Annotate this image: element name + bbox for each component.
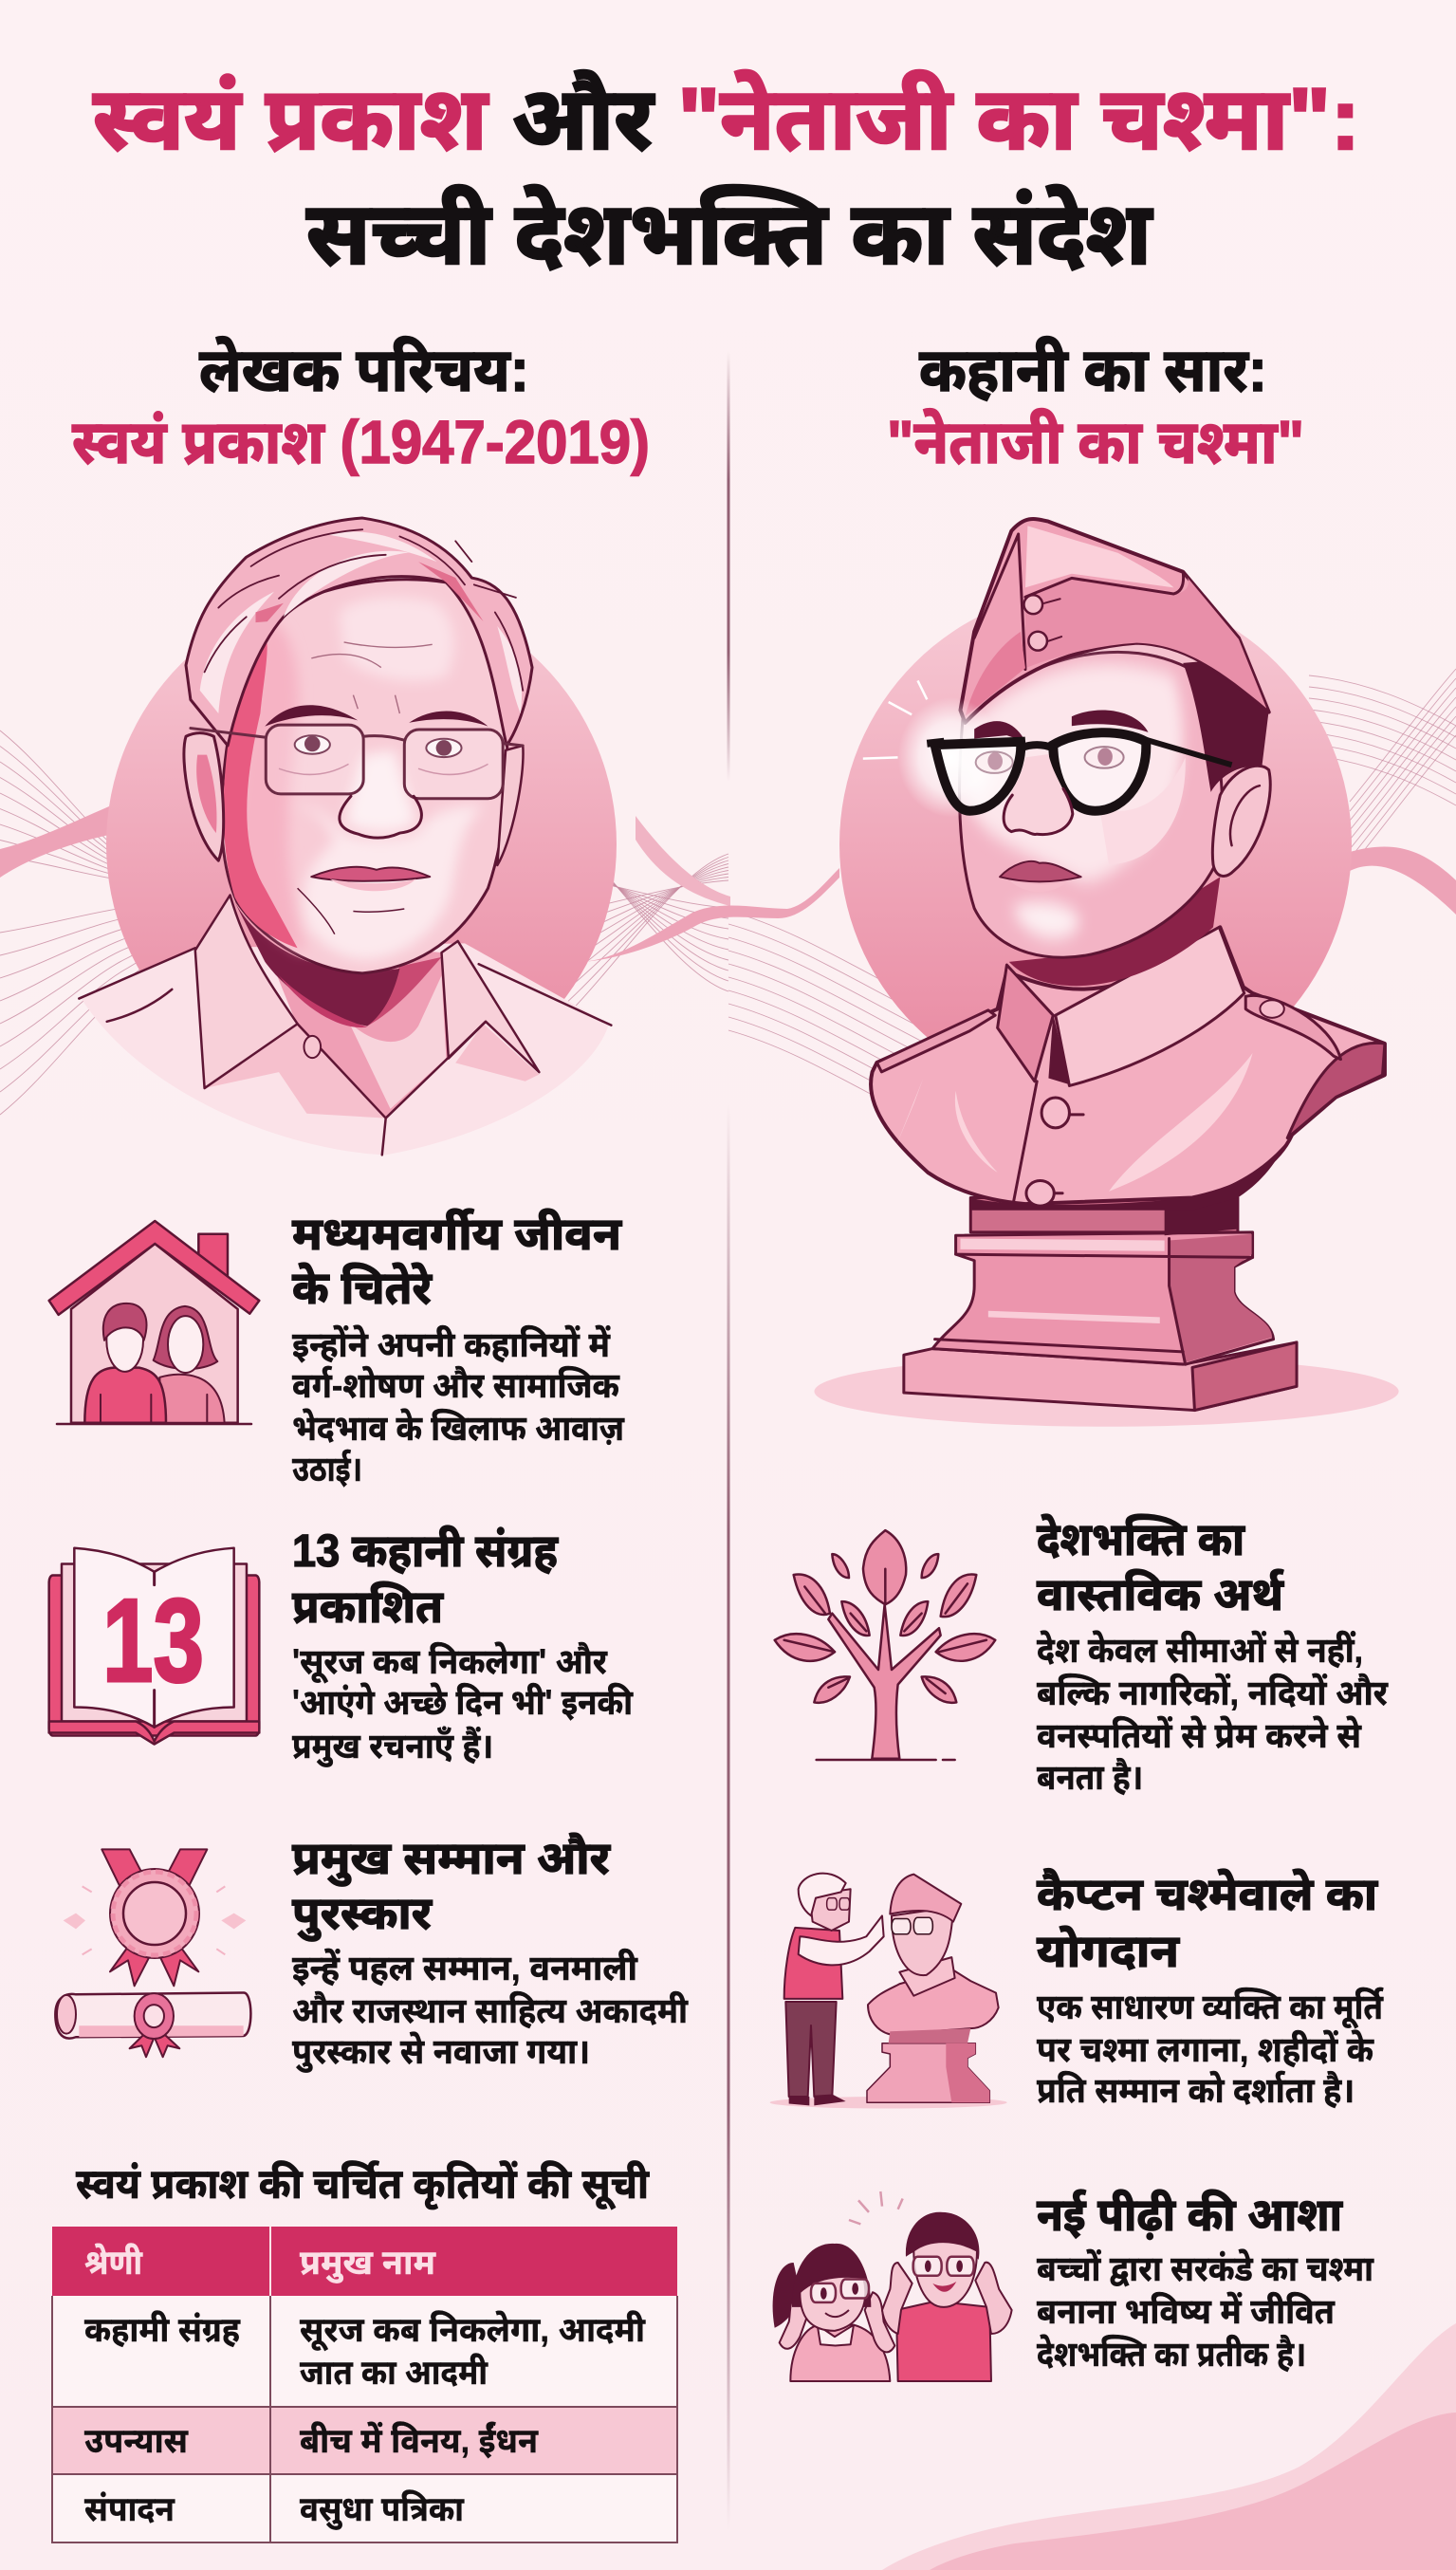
title: स्वयं प्रकाश और "नेताजी का चश्मा": — [93, 71, 1360, 168]
heading: author intro: स्वयं प्रकाश (1947-2019) — [72, 408, 650, 476]
heading and text: पर चश्मा लगाना, शहीदों के — [1037, 2029, 1374, 2069]
number 13: 13 — [102, 1576, 204, 1707]
table text: सूरज कब निकलेगा, आदमी — [300, 2309, 646, 2351]
portrait: Swayam Prakash — [79, 518, 617, 1155]
heading and text: पुरस्कार — [292, 1889, 433, 1941]
heading and text: इन्हें पहल सम्मान, वनमाली — [292, 1948, 638, 1988]
heading and text — [1037, 1513, 1389, 1797]
heading and text: भेदभाव के खिलाफ आवाज़ — [292, 1408, 625, 1448]
heading and text: एक साधारण व्यक्ति का मूर्ति — [1037, 1987, 1384, 2028]
heading and text: इन्होंने अपनी कहानियों में — [292, 1324, 611, 1364]
icon: open book 13 — [49, 1548, 259, 1745]
table text: संपादन — [84, 2489, 175, 2528]
table text: कहामी संग्रह — [84, 2310, 241, 2349]
heading and text: 'सूरज कब निकलेगा' और — [292, 1641, 608, 1683]
heading: story summary — [887, 336, 1304, 476]
central divider — [727, 351, 730, 2530]
title — [93, 71, 1360, 283]
title: सच्ची देशभक्ति का संदेश — [306, 186, 1153, 283]
table text — [84, 2242, 646, 2530]
background waves bottom right — [882, 2323, 1456, 2570]
heading and text — [1037, 1868, 1384, 2110]
heading and text: देशभक्ति का — [1037, 1513, 1245, 1565]
heading and text: मध्यमवर्गीय जीवन — [292, 1208, 623, 1260]
icon: children with glasses — [773, 2191, 1012, 2381]
heading and text: नई पीढ़ी की आशा — [1037, 2189, 1343, 2241]
icon: house with couple — [49, 1221, 259, 1424]
heading and text: 'आएंगे अच्छे दिन भी' इनकी — [292, 1682, 634, 1722]
heading and text: बनाना भविष्य में जीवित — [1037, 2291, 1336, 2331]
heading and text: वर्ग-शोषण और सामाजिक — [292, 1365, 620, 1405]
item: Captain's contribution — [770, 1868, 1384, 2110]
heading and text: उठाई। — [292, 1449, 362, 1488]
icon: man fitting glasses on statue — [770, 1874, 1007, 2108]
heading and text: देश केवल सीमाओं से नहीं, — [1037, 1630, 1363, 1670]
heading and text: बनता है। — [1037, 1757, 1143, 1797]
icon: medal and scroll — [55, 1849, 250, 2057]
heading: author intro — [72, 336, 650, 476]
heading: story summary: "नेताजी का चश्मा" — [887, 408, 1304, 476]
heading and text: पुरस्कार से नवाजा गया। — [292, 2031, 590, 2073]
heading: author intro: लेखक परिचय: — [199, 336, 529, 404]
item: awards — [55, 1833, 689, 2073]
portrait: Netaji bust — [814, 519, 1399, 1427]
heading and text: प्रति सम्मान को दर्शाता है। — [1037, 2070, 1355, 2110]
heading and text: के चितेरे — [292, 1262, 433, 1314]
icon: tree — [775, 1530, 995, 1760]
background line waves — [0, 669, 1456, 1135]
item: real meaning of patriotism — [775, 1513, 1389, 1797]
heading and text: प्रमुख सम्मान और — [292, 1833, 611, 1886]
item: 13 story collections — [49, 1525, 634, 1767]
heading and text — [292, 1833, 689, 2073]
heading and text — [292, 1525, 634, 1767]
table: notable works — [52, 2160, 677, 2542]
heading and text: कैप्टन चश्मेवाले का — [1037, 1868, 1378, 1920]
table title: स्वयं प्रकाश की चर्चित कृतियों की सूची — [76, 2160, 650, 2210]
heading and text — [292, 1208, 625, 1488]
item: middle-class life — [49, 1208, 625, 1488]
table text: श्रेणी — [84, 2242, 143, 2282]
heading and text: 13 कहानी संग्रह — [292, 1525, 559, 1577]
table text: उपन्यास — [84, 2421, 189, 2460]
table text: वसुधा पत्रिका — [300, 2489, 465, 2530]
heading and text: वनस्पतियों से प्रेम करने से — [1037, 1715, 1362, 1755]
heading and text: योगदान — [1037, 1926, 1181, 1977]
table text: प्रमुख नाम — [300, 2243, 436, 2283]
heading and text: प्रकाशित — [292, 1581, 444, 1633]
heading and text — [1037, 2189, 1374, 2374]
heading and text: देशभक्ति का प्रतीक है। — [1037, 2334, 1306, 2374]
heading and text: और राजस्थान साहित्य अकादमी — [292, 1991, 689, 2030]
item: new generation's hope — [773, 2189, 1374, 2381]
heading and text: बच्चों द्वारा सरकंडे का चश्मा — [1037, 2248, 1374, 2288]
heading and text: वास्तविक अर्थ — [1037, 1568, 1284, 1620]
heading and text: बल्कि नागरिकों, नदियों और — [1037, 1673, 1389, 1712]
table text: जात का आदमी — [300, 2353, 488, 2392]
heading: story summary: कहानी का सार: — [919, 336, 1267, 404]
table text: बीच में विनय, ईंधन — [300, 2421, 539, 2460]
heading and text: प्रमुख रचनाएँ हैं। — [292, 1726, 493, 1767]
table grid — [52, 2227, 677, 2542]
